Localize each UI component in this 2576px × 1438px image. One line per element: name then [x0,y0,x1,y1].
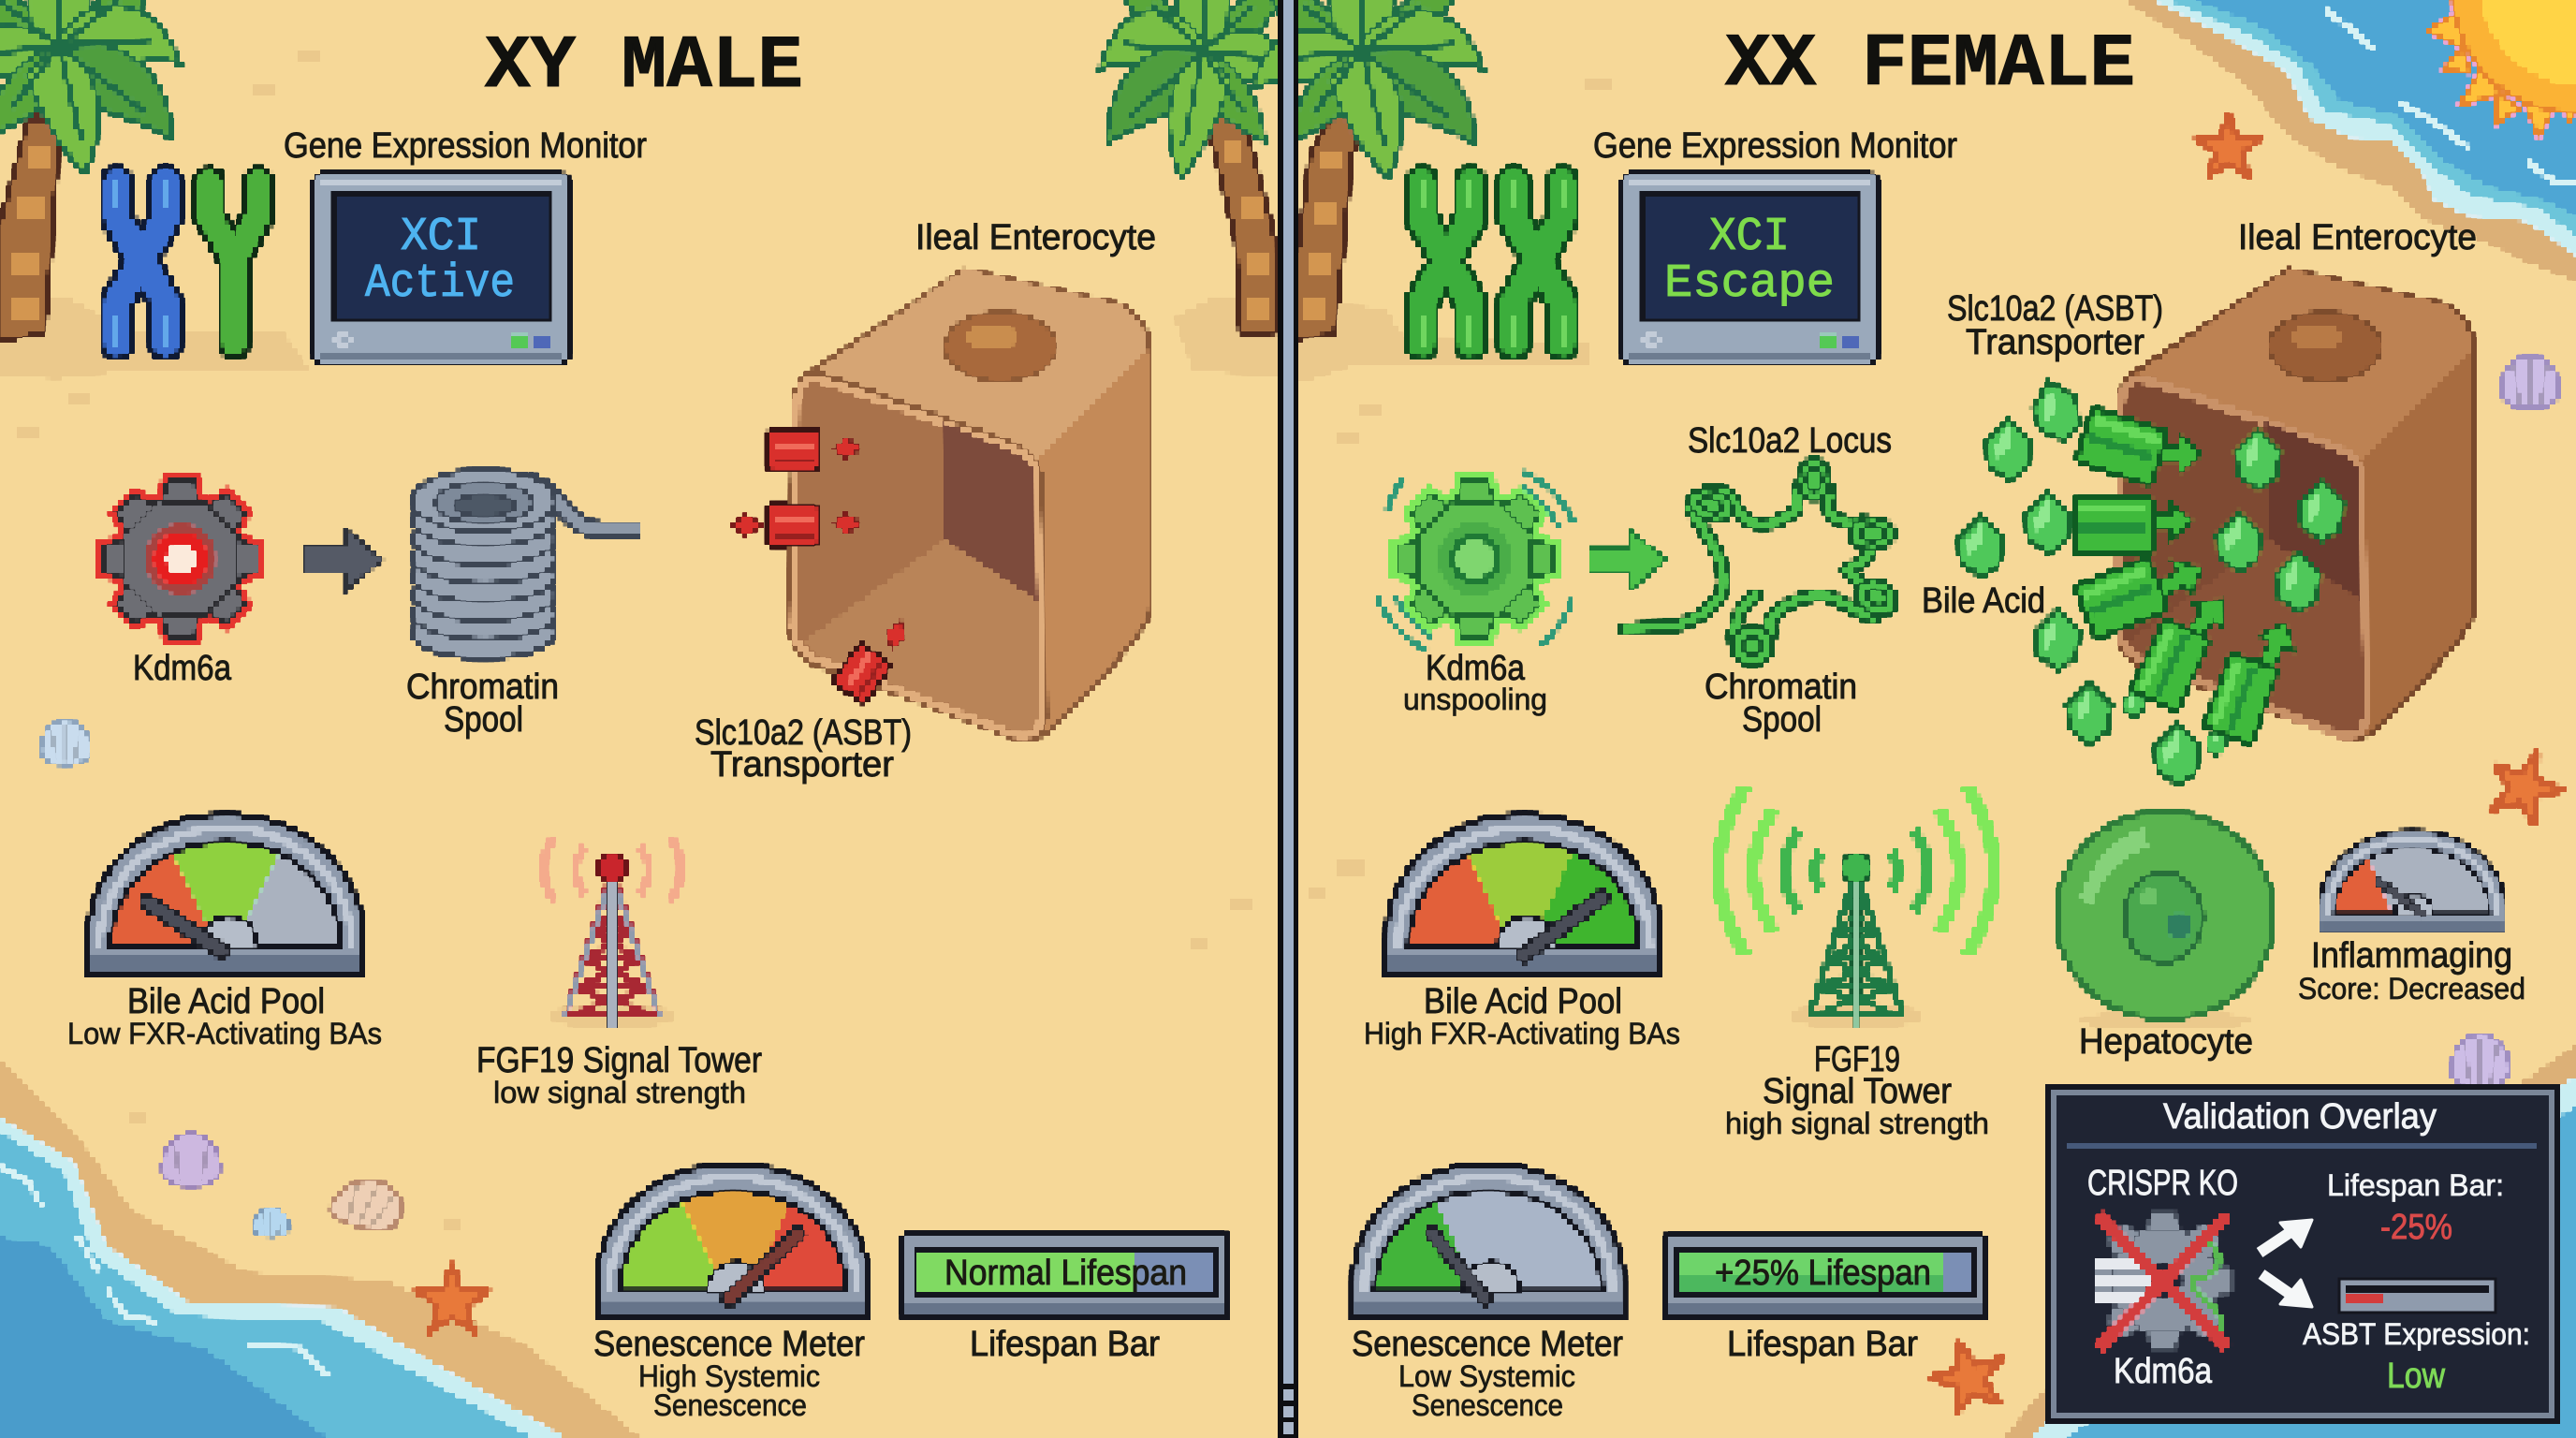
screen text: XCI: XCI [1709,211,1790,264]
label: inflammaging [2298,936,2525,1005]
overlay label: Kdm6a: Kdm6a [2114,1352,2213,1391]
label: FGF19 signal tower: FGF19 [1814,1040,1900,1079]
icon: sun [2427,0,2576,138]
label: inflammaging: Score: Decreased [2298,972,2525,1005]
label: inflammaging: Inflammaging [2311,936,2512,976]
label: ileal enterocyte: Ileal Enterocyte [2238,218,2477,257]
label: Slc10a2 transporter [1947,289,2163,362]
icon: Kdm6a gear [103,481,258,637]
label: hepatocyte: Hepatocyte [2079,1022,2253,1062]
overlay frame [2048,1087,2557,1421]
ocean: bottom left [0,1061,640,1438]
icon: X chromosome green 2 [1514,181,1562,345]
label: bile acid pool: High FXR-Activating BAs [1364,1017,1680,1050]
icon: knocked out Kdm6a gear [2095,1212,2232,1349]
label: Kdm6a unspooling: unspooling [1403,682,1547,716]
screen text: escape: Escape [1664,257,1835,311]
label: Slc10a2 transporter: Slc10a2 (ASBT) [1947,289,2163,329]
label: senescence meter [593,1325,865,1422]
screen text: active: Active [365,257,515,311]
label: bile acid pool: Low FXR-Activating BAs [67,1017,382,1050]
label: Slc10a2 transporter [695,713,912,785]
gene expression monitor [1622,173,1878,364]
label: Kdm6a unspooling: Kdm6a [1426,649,1526,688]
label: FGF19 signal tower [1725,1040,1989,1140]
label: Slc10a2 transporter: Transporter [710,745,894,785]
XX female illustrations [1353,173,2505,1319]
panel: XX female [1352,22,2525,1422]
icon: palm tree right [1251,0,1484,339]
Slc10a2 transporters (green) with arrows [2074,407,2304,744]
label: senescence meter [1352,1325,1623,1422]
sand patches and shadows [0,51,1611,1230]
label: lifespan bar: Lifespan Bar [970,1325,1160,1364]
label: normal lifespan: Normal Lifespan [944,1254,1187,1293]
label: FGF19 signal tower: low signal strength [493,1076,746,1109]
label: FGF19 signal tower: high signal strength [1725,1107,1989,1140]
overlay border [2054,1093,2552,1416]
icon: chromatin spool [413,470,642,658]
label: senescence meter: Senescence [653,1388,807,1422]
label: chromatin spool: Spool [444,700,523,740]
XY male illustrations [88,173,1228,1319]
gauge: bile acid pool high [1386,814,1661,976]
Slc10a2 transporters (red) [733,430,911,704]
label: FGF19 signal tower: FGF19 Signal Tower [476,1041,762,1080]
label: Kdm6a unspooling [1403,649,1547,716]
label: plus 25 percent lifespan: +25% Lifespan [1715,1254,1931,1293]
overlay label: ASBT expression: ASBT Expression: [2303,1317,2530,1351]
icon: FGF19 signal tower weak [543,837,681,1030]
gauge: senescence meter high [597,1165,869,1319]
ocean: bottom right [2003,1046,2576,1438]
label: gene expression monitor: Gene Expression Monitor [284,126,647,166]
icon: hepatocyte [2056,812,2274,1030]
icon: palm tree left [0,0,181,342]
title: XY male: XY MALE [485,24,803,110]
label: lifespan bar: Lifespan Bar [1727,1325,1918,1364]
label: senescence meter: High Systemic [638,1359,820,1393]
title: XX female: XX FEMALE [1725,22,2135,108]
panel: XY male [67,24,1228,1422]
overlay value: low: Low [2387,1357,2445,1396]
label: ileal enterocyte: Ileal Enterocyte [915,218,1156,257]
arrow: gear to locus [1589,532,1666,590]
label: bile acid pool: Bile Acid Pool [1424,982,1622,1021]
overlay value: minus 25 percent: -25% [2380,1208,2452,1247]
label: Slc10a2 transporter: Transporter [1966,323,2144,362]
icon: X chromosome blue [117,181,166,345]
overlay title: Validation Overlay [2163,1097,2437,1137]
label: bile acid: Bile Acid [1922,581,2045,621]
label: chromatin spool [1705,668,1857,740]
label: senescence meter: Senescence [1412,1388,1563,1422]
label: gene expression monitor: Gene Expression Monitor [1593,126,1957,166]
centre divider [1278,0,1298,1438]
icon: Y chromosome green [210,183,258,344]
label: senescence meter: Senescence Meter [1352,1325,1623,1364]
label: Slc10a2 transporter: Slc10a2 (ASBT) [695,713,912,753]
label: chromatin spool: Chromatin [406,668,559,707]
icon: palm tree centre [1099,0,1296,335]
screen text: XCI active: XCI [401,211,481,264]
gene expression monitor [314,173,569,364]
label: bile acid pool [1364,982,1680,1050]
label: chromatin spool: Spool [1742,700,1822,740]
label: Kdm6a: Kdm6a [133,649,232,688]
gauge: senescence meter low [1353,1165,1624,1319]
gauge: inflammaging decreased [2320,830,2505,932]
lifespan bar normal [903,1235,1228,1319]
overlay label: lifespan bar: Lifespan Bar: [2327,1168,2504,1202]
label: FGF19 signal tower [476,1041,762,1109]
bile acid crystals [1958,376,2344,785]
label: senescence meter: Low Systemic [1398,1359,1575,1393]
panel: validation overlay [2048,1087,2557,1421]
heading rule [2067,1143,2537,1149]
icon: Kdm6a active gear [1376,471,1574,651]
icon: X chromosome green 1 [1422,181,1471,345]
icon: ileal enterocyte [2117,270,2475,740]
lifespan bar plus 25 percent [1664,1236,1984,1319]
label: bile acid pool [67,982,382,1050]
gauge: bile acid pool low [88,814,363,976]
arrows: knockout effects [2260,1220,2312,1307]
mini expression bar [2339,1279,2496,1313]
icon: FGF19 signal tower strong [1719,786,1994,1030]
label: senescence meter: Senescence Meter [593,1325,865,1364]
label: bile acid pool: Bile Acid Pool [127,982,325,1021]
ocean: top right [2125,0,2576,281]
arrow: gear to spool [305,530,382,590]
icon: ileal enterocyte [793,270,1150,740]
overlay label: CRISPR KO: CRISPR KO [2087,1164,2238,1203]
label: chromatin spool [406,668,559,740]
label: Slc10a2 locus: Slc10a2 Locus [1688,421,1892,461]
label: FGF19 signal tower: Signal Tower [1763,1072,1952,1111]
icon: unspooled chromatin locus [1625,459,1903,665]
label: chromatin spool: Chromatin [1705,668,1857,707]
